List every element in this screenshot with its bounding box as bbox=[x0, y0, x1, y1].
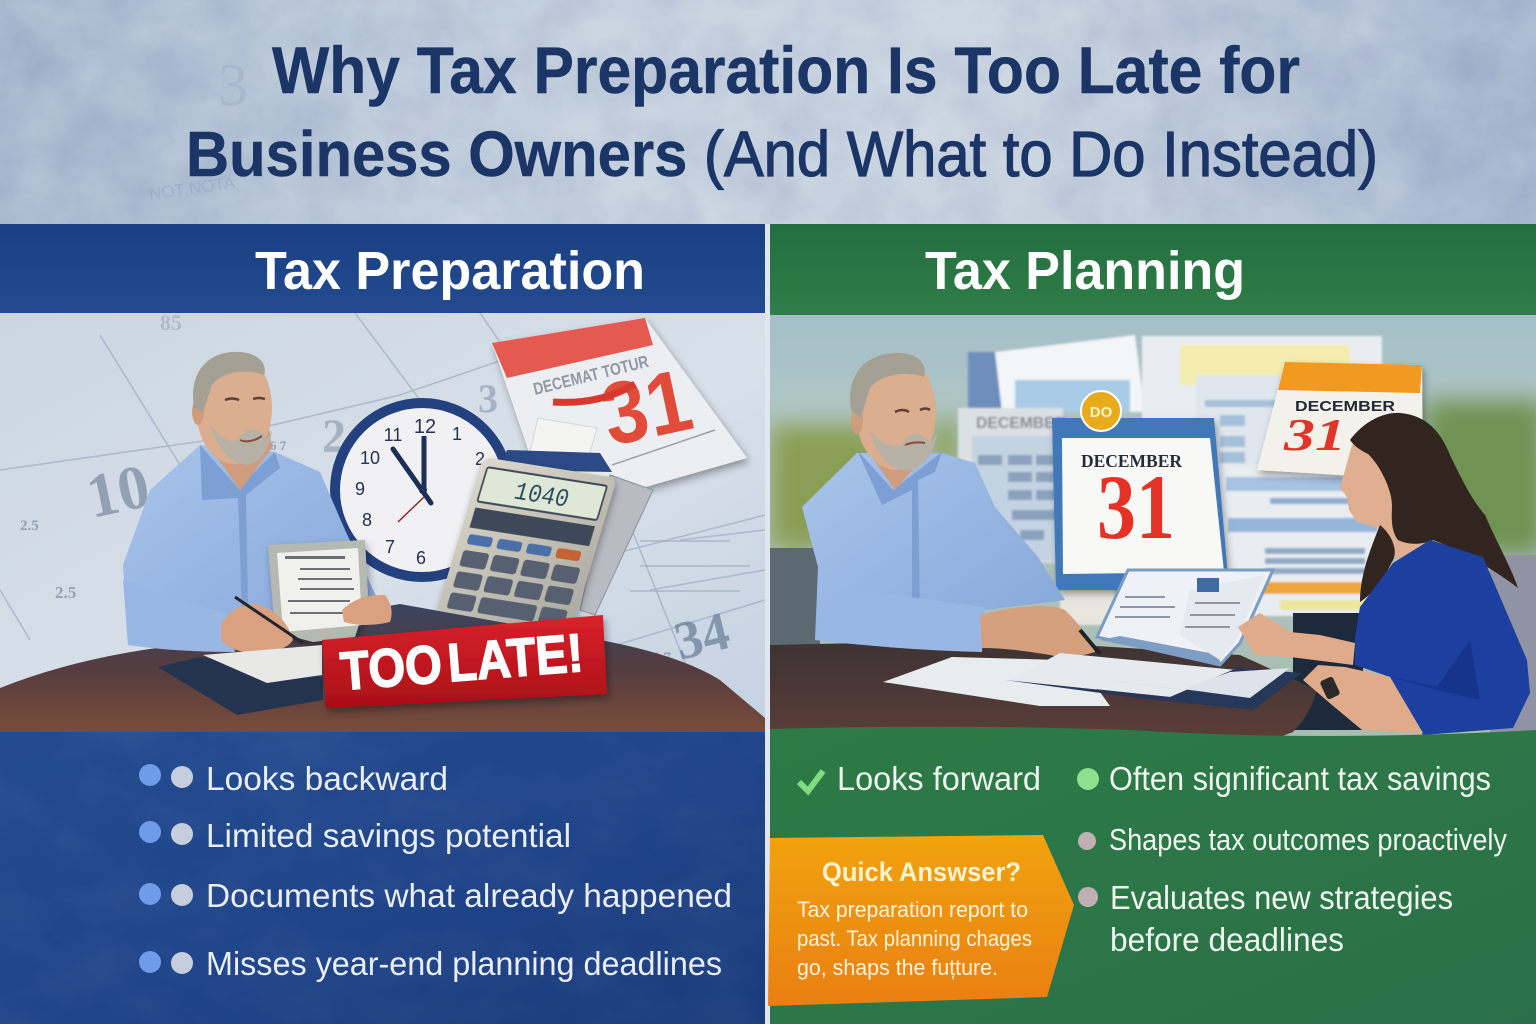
callout: quick answer: past. Tax planning chages bbox=[797, 926, 1032, 951]
clock: 9 bbox=[355, 479, 365, 499]
folder on table bbox=[158, 645, 323, 715]
title: Business Owners (And What to Do Instead) bbox=[186, 118, 1378, 190]
bullet: tax savings: Often significant tax savings bbox=[1109, 760, 1491, 797]
bullet: evaluates strategies: before deadlines bbox=[1110, 921, 1344, 958]
man seated bbox=[802, 353, 1065, 650]
bullet row: misses deadlines: Misses year-end planning deadlines bbox=[206, 945, 722, 982]
faint calendar numbers: 2.5 bbox=[20, 518, 39, 534]
table bbox=[770, 640, 1317, 737]
papers on table bbox=[883, 570, 1302, 710]
calculator: 1040 bbox=[510, 479, 572, 515]
left december sheet bbox=[958, 408, 1063, 563]
hand with pen bbox=[980, 606, 1100, 657]
clock: 8 bbox=[362, 510, 372, 530]
badge: do: DO bbox=[1090, 404, 1113, 421]
title: Why Tax Preparation Is Too Late for bbox=[272, 33, 1300, 107]
calendar: orange 31: DECEMBER bbox=[1295, 398, 1395, 415]
badge: do bbox=[1081, 391, 1121, 431]
callout: quick answer: Quick Answser? bbox=[822, 857, 1021, 887]
panel: tax preparation list bbox=[0, 732, 765, 1024]
lower arm with watch bbox=[1303, 665, 1423, 733]
clipboard tab behind calculator bbox=[500, 450, 612, 472]
title background bbox=[0, 0, 1536, 224]
hair bbox=[1350, 413, 1518, 602]
illustration: planning scene bbox=[770, 315, 1536, 737]
bullet row: documents: Documents what already happened bbox=[206, 877, 732, 914]
stacked documents bbox=[958, 335, 1382, 625]
hands and pen bbox=[221, 595, 392, 652]
faint calendar numbers: 10 bbox=[81, 452, 156, 532]
foliage bbox=[770, 400, 1536, 555]
calendar: december 31: DECEMBER bbox=[1081, 451, 1183, 471]
blue top bbox=[1355, 540, 1530, 735]
calendar: red 31 bbox=[492, 318, 747, 500]
clock: 6 bbox=[416, 548, 426, 568]
title bbox=[186, 33, 1378, 190]
clock: 11 bbox=[384, 425, 402, 445]
calendar: december 31: 31 bbox=[1097, 456, 1175, 558]
clock: 10 bbox=[360, 448, 380, 468]
clock: 1 bbox=[452, 424, 462, 444]
panel: tax planning header bbox=[770, 224, 1536, 315]
small note behind calculator bbox=[530, 418, 598, 453]
faint calendar numbers bbox=[20, 310, 735, 672]
stack of papers behind calculator bbox=[580, 475, 653, 615]
bullet: evaluates strategies: Evaluates new strategies bbox=[1110, 879, 1453, 916]
callout: quick answer bbox=[768, 835, 1074, 1006]
faint calendar numbers: 2.5 bbox=[55, 583, 76, 602]
bullet row: looks backward: Looks backward bbox=[206, 760, 448, 797]
callout: quick answer: Tax preparation report to bbox=[797, 897, 1028, 922]
bullet row: limited savings: Limited savings potential bbox=[206, 817, 571, 854]
clock: 7 bbox=[385, 537, 395, 557]
calendar: orange 31 bbox=[1257, 362, 1423, 480]
title background: NOT NOTA bbox=[148, 173, 237, 204]
faint calendar numbers: 34 bbox=[668, 600, 735, 672]
faint calendar numbers: 6 7 bbox=[270, 438, 287, 453]
clock bbox=[335, 403, 509, 577]
upper arm and hand bbox=[1238, 613, 1355, 665]
callout: quick answer: go, shaps the fuțture. bbox=[797, 955, 998, 980]
woman bbox=[1238, 413, 1530, 735]
calculator bbox=[435, 457, 617, 639]
man at desk bbox=[123, 352, 378, 652]
shirt forearm bbox=[123, 580, 235, 652]
banner: too late: TOO LATE! bbox=[338, 623, 585, 702]
faint calendar numbers: 3 bbox=[478, 376, 498, 421]
calendar: red 31: 31 bbox=[593, 349, 700, 465]
faint calendar numbers: 8 S 7 bbox=[640, 650, 671, 666]
clock: 12 bbox=[414, 416, 436, 438]
document held up bbox=[268, 540, 368, 642]
calendar: december 31 bbox=[1052, 418, 1228, 590]
shirt forearm bbox=[816, 598, 985, 652]
panel: tax planning header: Tax Planning bbox=[925, 241, 1245, 301]
face and neck bbox=[1340, 444, 1426, 560]
title background: 3 bbox=[218, 52, 248, 118]
calendar: red 31: DECEMAT TOTUR bbox=[531, 352, 650, 399]
dark chair behind table bbox=[1293, 613, 1363, 730]
faint calendar numbers: 85 bbox=[160, 310, 182, 335]
bullet: evaluates strategies bbox=[1078, 879, 1453, 958]
table bbox=[0, 604, 765, 733]
illustration: too late scene bbox=[0, 310, 765, 733]
check: looks forward: Looks forward bbox=[837, 760, 1041, 797]
clock: 2 bbox=[475, 449, 485, 469]
stacked documents: DECEMBER bbox=[976, 415, 1066, 432]
panel: tax preparation header bbox=[0, 224, 765, 313]
faint calendar numbers: 2 bbox=[322, 410, 346, 463]
calendar: orange 31: 31 bbox=[1283, 409, 1346, 460]
panel: tax planning list bbox=[770, 727, 1536, 1024]
divider column bbox=[765, 224, 770, 1024]
panel: tax preparation header: Tax Preparation bbox=[255, 241, 645, 301]
